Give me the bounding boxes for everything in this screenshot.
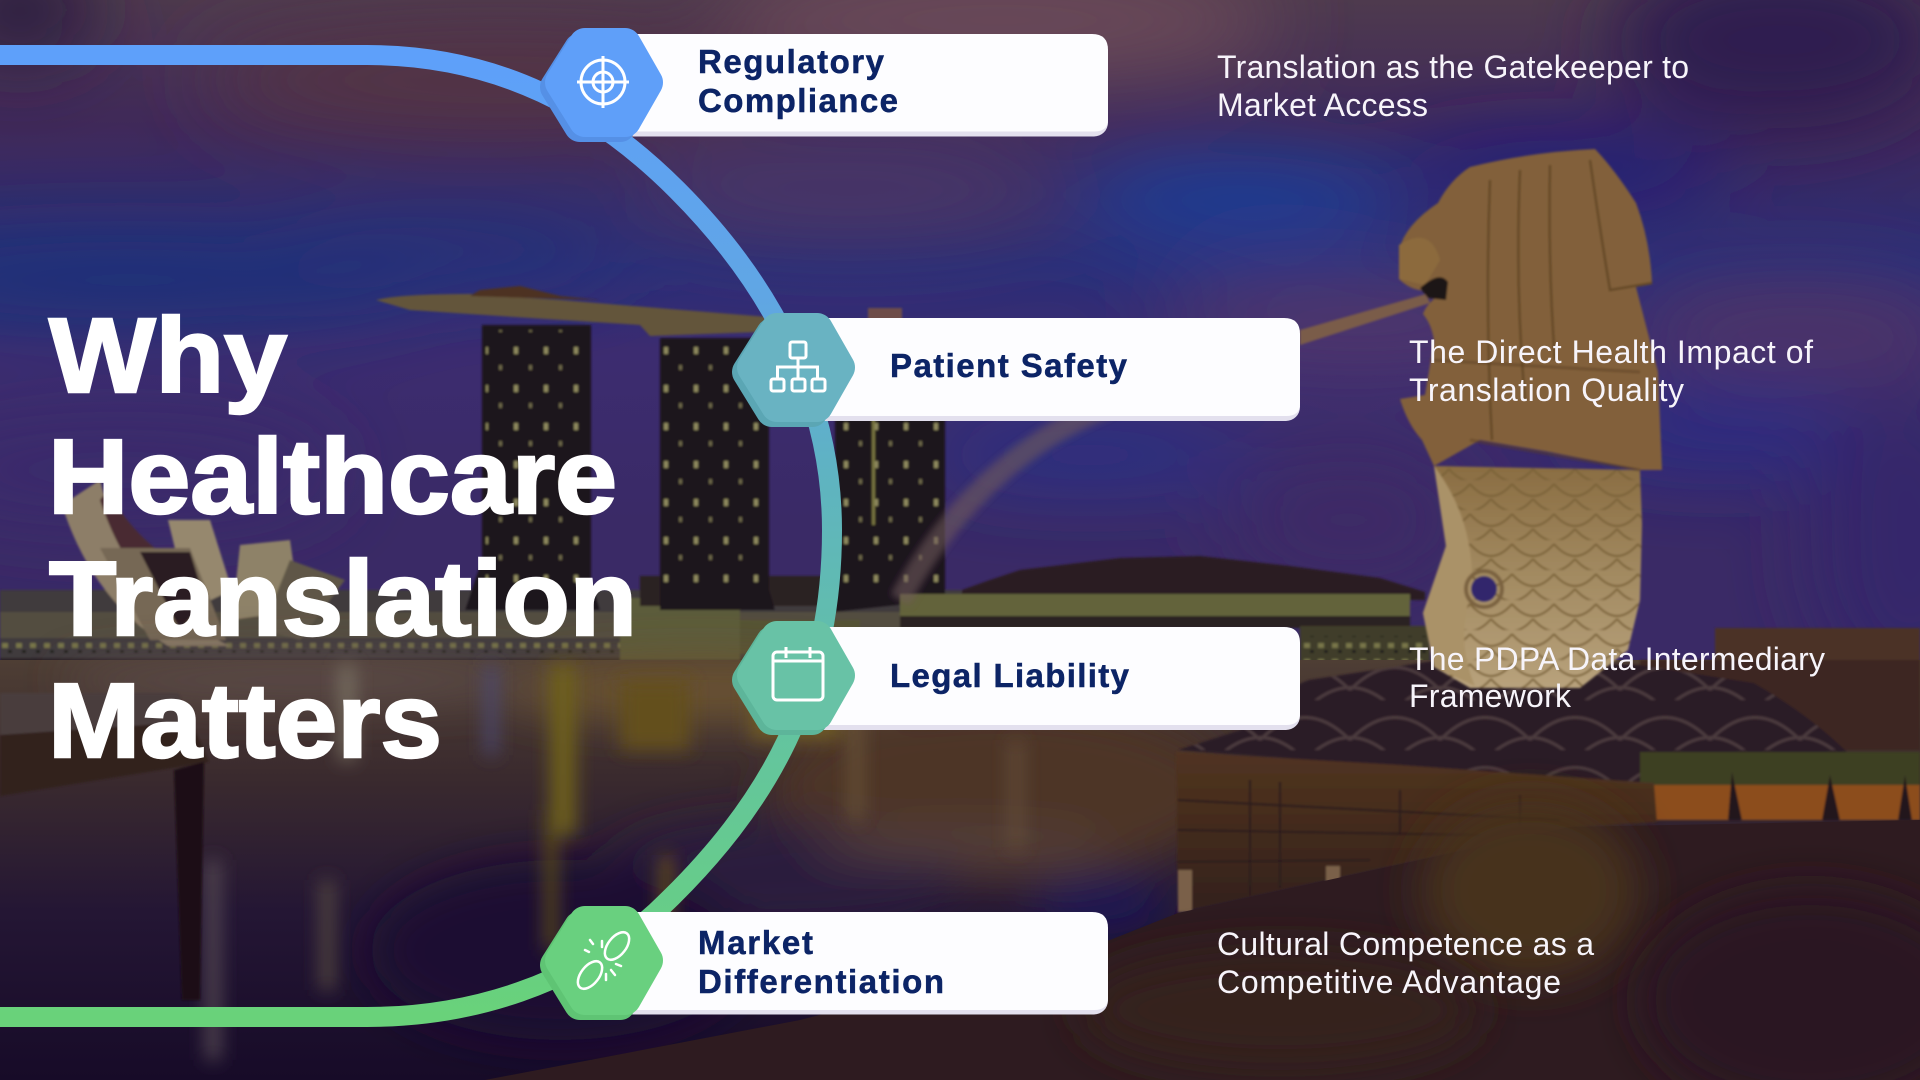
description: market access <box>1217 49 1689 123</box>
card <box>610 912 1108 1014</box>
item: Regulatory Compliance <box>556 34 1108 136</box>
description: health impact: Translation Quality <box>1409 372 1684 408</box>
water <box>0 658 1920 1080</box>
hexagon badge <box>556 44 647 126</box>
label <box>698 43 898 119</box>
theatre dome and waterfront arcade <box>900 556 1430 686</box>
far shore buildings <box>0 286 1430 686</box>
description: data framework <box>1409 641 1825 714</box>
merlion statue <box>1300 149 1662 688</box>
water jet <box>1300 294 1430 345</box>
hexagon badge <box>748 637 839 719</box>
marina bay sands towers <box>376 286 945 612</box>
card <box>802 627 1300 730</box>
merlion mane and head <box>1399 149 1662 470</box>
card <box>610 34 1108 136</box>
description: competitive advantage <box>1217 926 1594 1000</box>
description: data framework: The PDPA Data Intermediary <box>1409 641 1825 677</box>
description: competitive advantage: Cultural Competence as a <box>1217 926 1594 962</box>
description: competitive advantage: Competitive Advantage <box>1217 964 1561 1000</box>
icon: calendar <box>773 647 823 700</box>
card <box>802 318 1300 421</box>
label: Market <box>698 924 813 961</box>
hexagon badge <box>556 922 647 1004</box>
art science museum <box>62 480 345 646</box>
hexagon badge <box>748 329 839 411</box>
label <box>698 924 944 1000</box>
description: health impact <box>1409 334 1813 408</box>
title <box>48 297 637 780</box>
label: Compliance <box>698 82 898 119</box>
merlion body <box>1423 466 1642 688</box>
connector curve <box>0 55 832 1017</box>
item: Legal Liability <box>748 627 1300 730</box>
title: Why <box>49 297 287 415</box>
icon: target <box>577 56 629 108</box>
label: Legal Liability <box>890 657 1130 694</box>
icon: broken chain <box>573 928 634 993</box>
description: data framework: Framework <box>1409 678 1572 714</box>
title: Matters <box>48 662 442 780</box>
title: Healthcare <box>48 418 617 536</box>
ground pavement <box>485 800 1920 1080</box>
description: market access: Market Access <box>1217 87 1428 123</box>
item: Market Differentiation <box>556 912 1108 1014</box>
icon: hierarchy <box>771 342 825 391</box>
item: Patient Safety <box>748 318 1300 421</box>
fountain base and buildings on the right <box>1176 628 1920 913</box>
label: Regulatory <box>698 43 885 80</box>
label: Differentiation <box>698 963 944 1000</box>
pier <box>0 693 209 1000</box>
label: Patient Safety <box>890 347 1128 384</box>
title: Translation <box>49 540 637 658</box>
description: health impact: The Direct Health Impact of <box>1409 334 1813 370</box>
rainbow water arc <box>900 405 1110 600</box>
description: market access: Translation as the Gatekeeper to <box>1217 49 1689 85</box>
